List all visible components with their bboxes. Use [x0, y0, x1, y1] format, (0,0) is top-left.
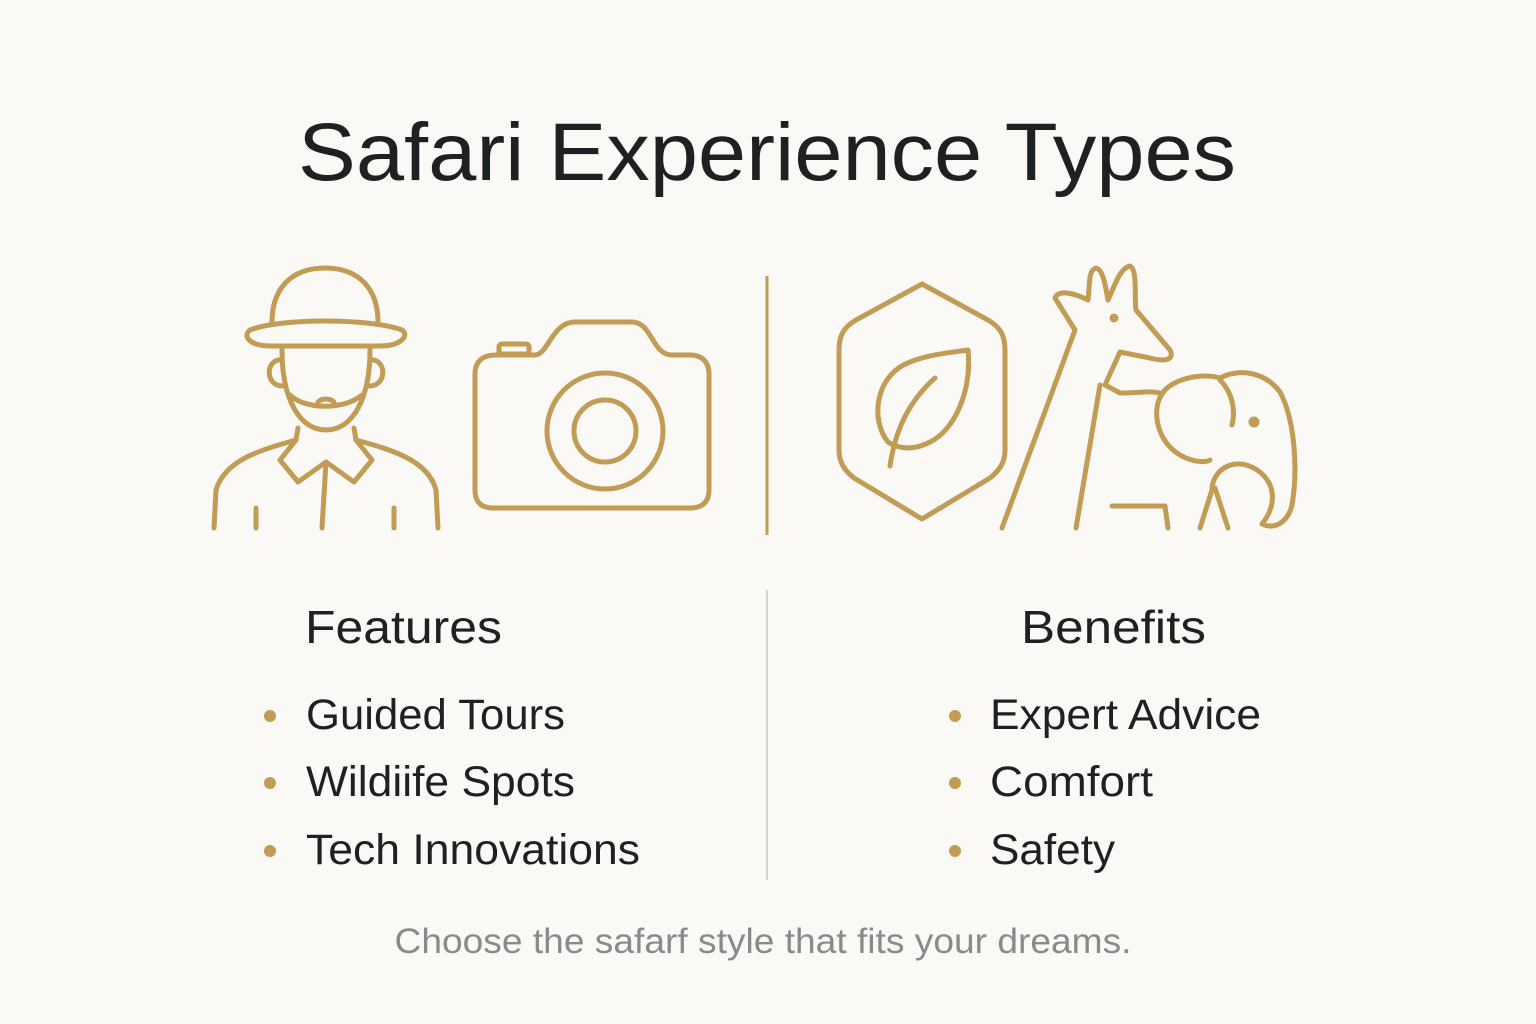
divider top	[766, 276, 768, 535]
panel: benefits: Safety	[990, 826, 1116, 874]
icon: giraffe and elephant	[1002, 266, 1295, 528]
panel: features: Tech Innovations	[306, 826, 640, 874]
panel: benefits: Benefits	[1021, 601, 1206, 653]
title: Safari Experience Types	[298, 107, 1236, 198]
panel: features: Guided Tours	[306, 691, 565, 739]
panel: benefits: Expert Advice	[990, 691, 1261, 739]
icon: camera	[475, 322, 709, 508]
panel: features: Wildiife Spots	[306, 758, 575, 806]
panel: benefits	[949, 601, 1261, 874]
divider bottom	[766, 590, 768, 880]
footer caption: Choose the safarf style that fits your dreams.	[394, 922, 1132, 961]
icon: safari guide	[214, 268, 438, 528]
panel: features: Features	[305, 601, 502, 653]
panel: benefits: Comfort	[990, 758, 1153, 806]
panel: features	[264, 601, 640, 874]
icon: shield with leaf	[839, 284, 1005, 519]
